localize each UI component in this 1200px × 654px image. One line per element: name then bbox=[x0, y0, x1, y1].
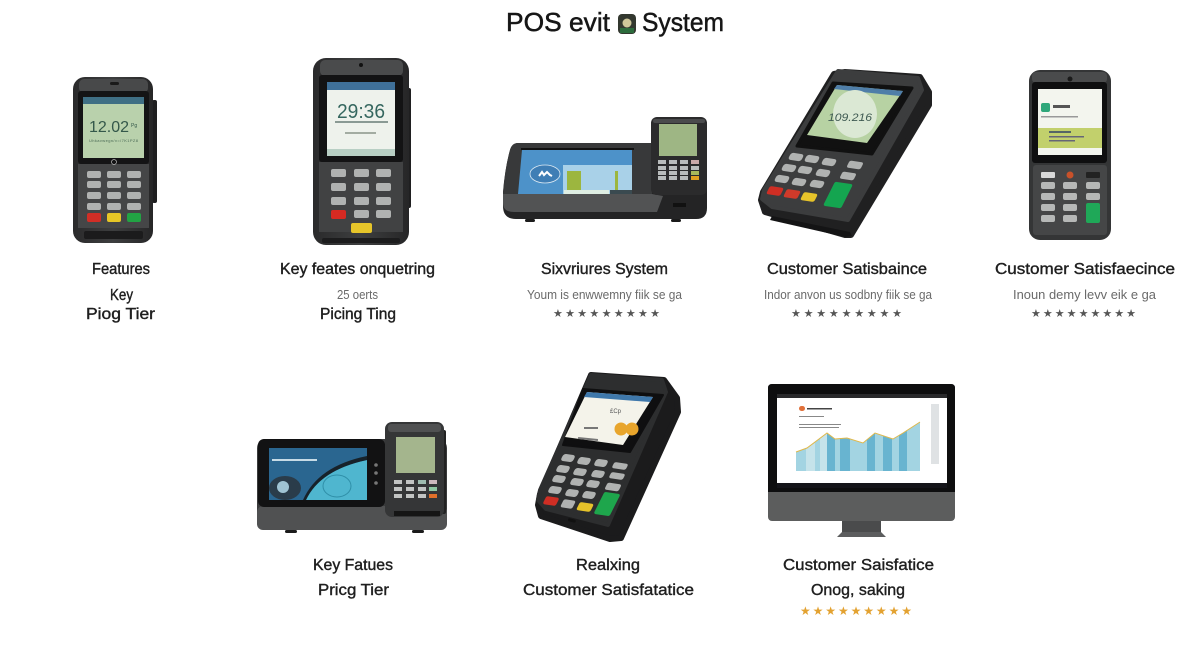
icon: handheld terminal 1 bbox=[73, 77, 157, 243]
label: pricing tier: Piog Tier bbox=[86, 306, 156, 323]
icon: handheld terminal 2: 29:36 bbox=[337, 101, 385, 123]
line chart bbox=[796, 422, 920, 471]
label: ongoing ranking: Onog, saking bbox=[811, 582, 905, 599]
title: POS evit bbox=[506, 7, 611, 37]
panel: device 4 customer satisfaction bbox=[761, 71, 933, 320]
icon: angled terminal 4: 109.216 bbox=[828, 112, 873, 124]
icon: handheld terminal 1: Pg bbox=[131, 123, 137, 129]
panel: device 5 customer satisfaction bbox=[995, 70, 1175, 320]
label: count: 25 oerts bbox=[337, 287, 378, 302]
heading: Customer Satisfaecince bbox=[995, 261, 1175, 278]
icon: angled terminal 7: £Cp bbox=[610, 409, 622, 415]
title: System bbox=[642, 7, 724, 37]
icon: desktop monitor with chart bbox=[768, 384, 955, 537]
panel: device 6 key features bbox=[257, 422, 447, 599]
label: key: Key bbox=[110, 287, 133, 304]
icon: handheld terminal 2 bbox=[313, 58, 411, 245]
icon: handheld terminal 1: 12.02 bbox=[89, 119, 129, 136]
heading: Sixvriures System bbox=[541, 261, 668, 278]
heading: Key feates onquetring bbox=[280, 261, 435, 278]
title bbox=[506, 7, 724, 37]
icon: countertop terminal 6 bbox=[257, 422, 447, 533]
icon: countertop terminal 3 bbox=[503, 117, 707, 222]
heading: Key Fatues bbox=[313, 557, 393, 574]
panel: device 2 key features bbox=[280, 58, 435, 323]
star rating: ★★★★★★★★★ bbox=[791, 307, 902, 320]
description: Indor anvon us sodbny fiik se ga bbox=[764, 287, 933, 302]
star rating: ★★★★★★★★★ bbox=[1031, 307, 1136, 320]
heading: Customer Satisbaince bbox=[767, 261, 927, 278]
panel: device 8 customer satisfaction bbox=[768, 384, 955, 618]
heading: Realxing bbox=[576, 557, 640, 574]
icon: title terminal bbox=[618, 14, 636, 34]
panel: device 7 realxing bbox=[523, 375, 694, 599]
star rating: ★★★★★★★★★ bbox=[553, 307, 660, 320]
icon: handheld terminal 1: Uhkavwegn/v=/7K1PZ8 bbox=[89, 138, 139, 143]
label: pricing tier: Pricg Tier bbox=[318, 582, 390, 599]
heading: Features bbox=[92, 261, 150, 278]
description: Youm is enwwemny fiik se ga bbox=[527, 287, 683, 302]
icon: angled terminal 4 bbox=[761, 71, 929, 237]
panel: device 3 services system bbox=[503, 117, 707, 320]
description: Inoun demy levv eik e ga bbox=[1013, 287, 1157, 302]
icon: angled terminal 7 bbox=[538, 375, 678, 539]
label: customer satisfaction: Customer Satisfatatice bbox=[523, 582, 694, 599]
icon: handheld terminal 5 bbox=[1029, 70, 1111, 240]
heading: Customer Saisfatice bbox=[783, 557, 934, 574]
label: pricing tier: Picing Ting bbox=[320, 306, 396, 323]
panel: device 1 features bbox=[73, 77, 157, 323]
star rating: ★★★★★★★★★ bbox=[800, 604, 912, 618]
